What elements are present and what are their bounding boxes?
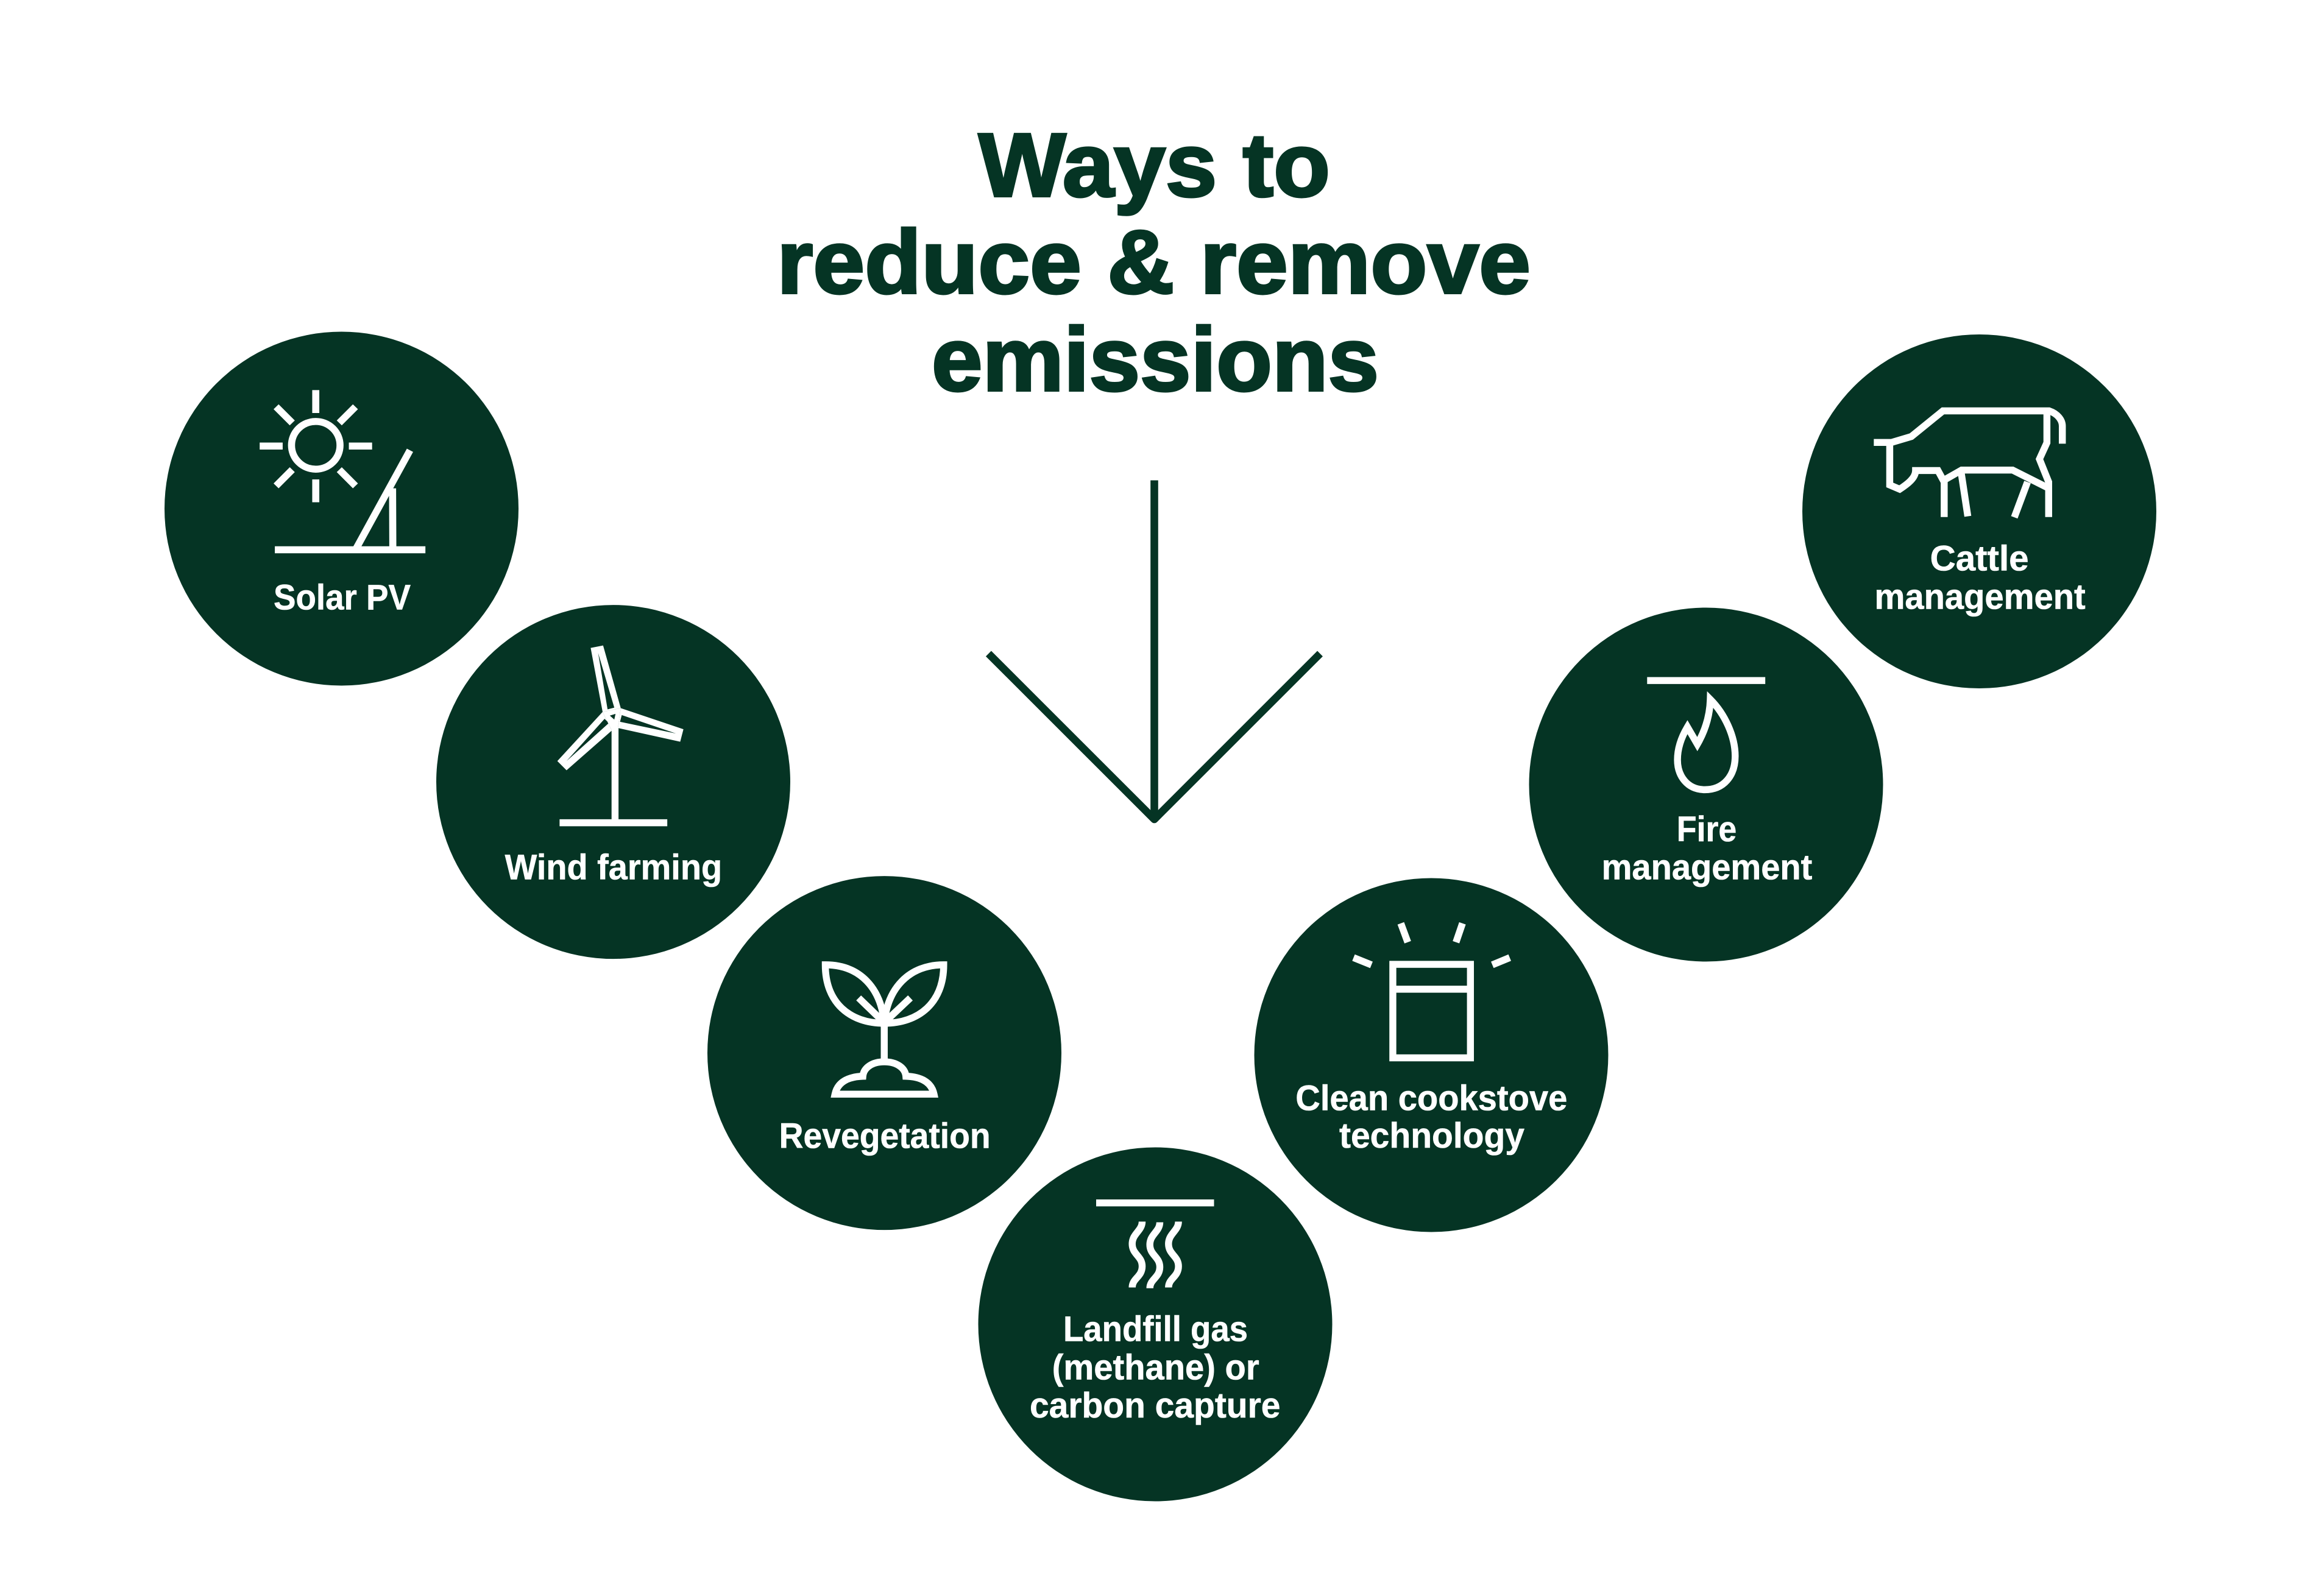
- label: clean cookstove technology: Clean cookstove: [1295, 1079, 1567, 1118]
- icon: wind turbine: [558, 646, 684, 823]
- panel: revegetation: [707, 876, 1061, 1230]
- label: fire management: [1602, 810, 1812, 887]
- icon: sun and solar panel: [260, 390, 425, 549]
- label: cattle management: [1874, 538, 2086, 616]
- label: revegetation: Revegetation: [779, 1116, 991, 1156]
- label: cattle management: Cattle: [1930, 538, 2029, 579]
- label: wind farming: Wind farming: [505, 848, 722, 888]
- title: Ways to: [979, 115, 1330, 216]
- panel: solar PV: [165, 331, 519, 686]
- icon: seedling: [826, 965, 944, 1094]
- icon: flame under a bar: [1647, 680, 1765, 789]
- label: fire management: management: [1602, 847, 1812, 887]
- label: landfill gas or carbon capture: Landfill gas: [1063, 1310, 1248, 1349]
- label: cattle management: management: [1874, 577, 2086, 616]
- label: landfill gas or carbon capture: (methane) or: [1052, 1347, 1259, 1388]
- icon: cookstove: [1353, 923, 1510, 1058]
- label: solar PV: Solar PV: [274, 577, 411, 617]
- arrow pointing down: [988, 480, 1320, 819]
- icon: grazing cow: [1874, 411, 2062, 517]
- panel: fire management: [1529, 608, 1883, 961]
- title: [777, 115, 1531, 410]
- panel: clean cookstove technology: [1254, 878, 1609, 1232]
- label: landfill gas or carbon capture: carbon capture: [1030, 1386, 1280, 1425]
- panel: landfill gas or carbon capture: [979, 1148, 1332, 1501]
- label: landfill gas or carbon capture: [1030, 1310, 1280, 1425]
- label: clean cookstove technology: technology: [1339, 1116, 1524, 1156]
- panel: wind farming: [436, 605, 790, 959]
- label: clean cookstove technology: [1295, 1079, 1567, 1156]
- title: emissions: [932, 309, 1379, 410]
- panel: cattle management: [1802, 334, 2156, 688]
- icon: rising gas under a bar: [1096, 1203, 1214, 1288]
- title: reduce & remove: [777, 212, 1531, 312]
- label: fire management: Fire: [1677, 810, 1737, 849]
